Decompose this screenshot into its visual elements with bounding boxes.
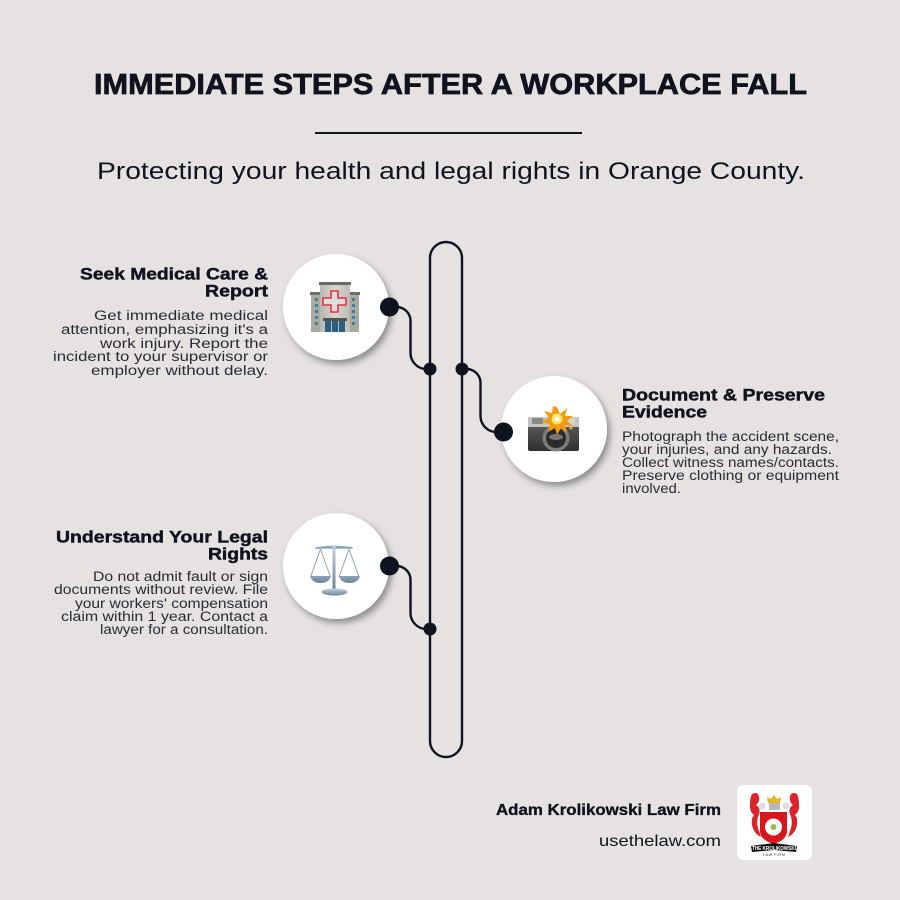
- heading 2: Document & Preserve: [622, 386, 825, 404]
- footer website: usethelaw.com: [599, 833, 721, 850]
- connector 1: [380, 298, 436, 376]
- body text 1: [53, 308, 269, 378]
- panel: document evidence: [456, 362, 839, 496]
- body text 2: involved.: [622, 481, 681, 496]
- body text 1: work injury. Report the: [99, 336, 268, 351]
- heading 2: [622, 386, 825, 422]
- subtitle: Protecting your health and legal rights in Orange County.: [97, 158, 805, 185]
- footer firm name: Adam Krolikowski Law Firm: [496, 802, 721, 819]
- step 1 circle: [283, 254, 389, 360]
- heading 3: [56, 528, 268, 564]
- panel: legal rights: [54, 513, 436, 637]
- heading 3: Understand Your Legal: [56, 528, 268, 546]
- icon: camera with flash: [528, 406, 579, 452]
- icon: hospital: [310, 282, 360, 332]
- body text 2: Collect witness names/contacts.: [622, 455, 839, 470]
- step 3 circle: [283, 513, 389, 619]
- title: IMMEDIATE STEPS AFTER A WORKPLACE FALL: [94, 69, 807, 101]
- body text 2: Preserve clothing or equipment: [622, 468, 839, 483]
- heading 1: Seek Medical Care &: [80, 264, 268, 284]
- body text 3: claim within 1 year. Contact a: [61, 609, 269, 624]
- body text 3: Do not admit fault or sign: [93, 569, 268, 584]
- body text 3: documents without review. File: [54, 582, 268, 597]
- body text 3: lawyer for a consultation.: [100, 622, 268, 637]
- heading 3: Rights: [208, 544, 268, 564]
- heading 2: Evidence: [622, 402, 707, 422]
- logo: THE KROLIKOWSKI: [752, 846, 796, 852]
- body text 1: incident to your supervisor or: [53, 349, 269, 364]
- body text 3: [54, 569, 269, 637]
- body text 2: Photograph the accident scene,: [622, 429, 839, 444]
- timeline pill: [430, 242, 462, 757]
- connector 2: [456, 362, 513, 442]
- body text 2: [622, 429, 839, 496]
- body text 1: employer without delay.: [91, 363, 268, 378]
- connector 3: [380, 556, 436, 636]
- heading 1: Report: [205, 282, 268, 300]
- icon: balance scales: [310, 545, 360, 596]
- heading 1: [80, 264, 268, 300]
- logo: [737, 785, 812, 860]
- logo: LAW FIRM: [763, 852, 785, 857]
- panel: seek medical care: [53, 254, 436, 378]
- body text 2: your injuries, and any hazards.: [622, 442, 832, 457]
- step 2 circle: [501, 376, 607, 482]
- body text 3: your workers' compensation: [75, 596, 268, 611]
- body text 1: Get immediate medical: [94, 308, 268, 323]
- body text 1: attention, emphasizing it's a: [61, 322, 269, 337]
